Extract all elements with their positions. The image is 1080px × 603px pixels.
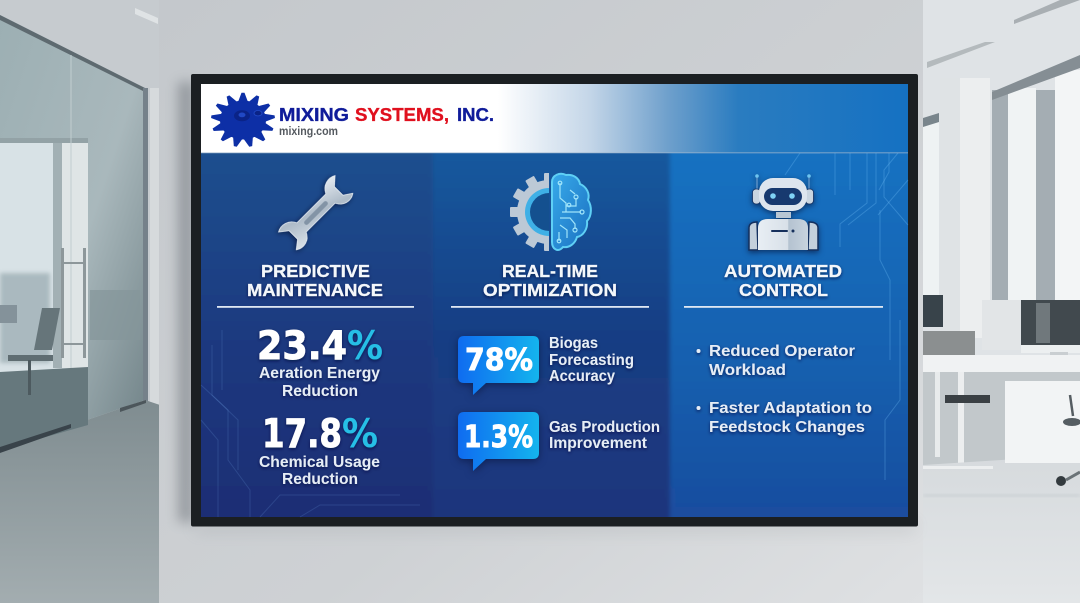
heading: CONTROL xyxy=(739,280,828,300)
heading: AUTOMATED xyxy=(724,261,842,281)
logo: gear xyxy=(211,93,275,147)
text: biogas forecasting xyxy=(549,335,634,385)
text: gas production: Improvement xyxy=(549,435,647,452)
bullet: faster adaptation: Faster Adaptation to xyxy=(709,400,872,417)
bullet: faster adaptation: Feedstock Changes xyxy=(709,419,865,436)
heading: OPTIMIZATION xyxy=(483,280,617,300)
bullet: reduced operator workload: Workload xyxy=(709,362,786,379)
header band xyxy=(201,84,908,154)
callout: 1.3%: 1.3% xyxy=(464,420,533,455)
text: gas production: Gas Production xyxy=(549,419,660,436)
panel: automated control xyxy=(684,174,883,436)
stat: aeration energy: Reduction xyxy=(282,383,358,400)
logo: website: mixing.com xyxy=(279,126,338,138)
stat: aeration energy xyxy=(257,324,383,400)
logo: company name: MIXING xyxy=(279,104,349,125)
stat: aeration energy: 23.4 xyxy=(257,324,347,369)
text: gas production xyxy=(549,419,660,452)
stat: aeration energy: % xyxy=(347,324,383,369)
bullet: reduced operator workload xyxy=(696,343,855,379)
heading xyxy=(724,261,842,300)
heading: PREDICTIVE xyxy=(261,261,370,281)
icon: wrench xyxy=(277,174,355,252)
callout: 1.3% xyxy=(458,412,539,471)
text: biogas forecasting: Accuracy xyxy=(549,368,615,385)
heading xyxy=(483,261,617,300)
bullet: reduced operator workload: Reduced Operator xyxy=(709,343,855,360)
stat: chemical usage: 17.8 xyxy=(262,412,342,457)
stat: chemical usage: Chemical Usage xyxy=(259,454,380,471)
circuit pattern: top right xyxy=(785,153,908,480)
logo: company name xyxy=(279,104,494,125)
background: office right side xyxy=(922,0,1080,603)
background: office left side xyxy=(0,0,160,603)
background: wall xyxy=(159,0,923,603)
stat: chemical usage xyxy=(259,412,380,488)
text: biogas forecasting: Forecasting xyxy=(549,352,634,369)
bullet: faster adaptation xyxy=(696,400,872,436)
circuit pattern: bottom left xyxy=(201,330,420,517)
heading xyxy=(247,261,383,300)
stat: chemical usage: Reduction xyxy=(282,471,358,488)
panel: real-time optimization xyxy=(451,173,660,471)
icon: gear and brain xyxy=(510,173,591,251)
callout: 78%: 78% xyxy=(465,343,533,378)
stat: chemical usage: % xyxy=(342,412,378,457)
heading: REAL-TIME xyxy=(502,261,598,281)
heading: MAINTENANCE xyxy=(247,280,383,300)
callout: 78% xyxy=(458,336,539,395)
text: biogas forecasting: Biogas xyxy=(549,335,598,352)
panel: predictive maintenance xyxy=(217,174,414,488)
screen xyxy=(200,153,908,518)
logo: company name: INC. xyxy=(457,104,494,125)
monitor frame xyxy=(191,74,918,526)
stat: aeration energy: Aeration Energy xyxy=(259,365,380,382)
icon: robot xyxy=(749,174,818,250)
logo: company name: SYSTEMS, xyxy=(355,104,449,125)
